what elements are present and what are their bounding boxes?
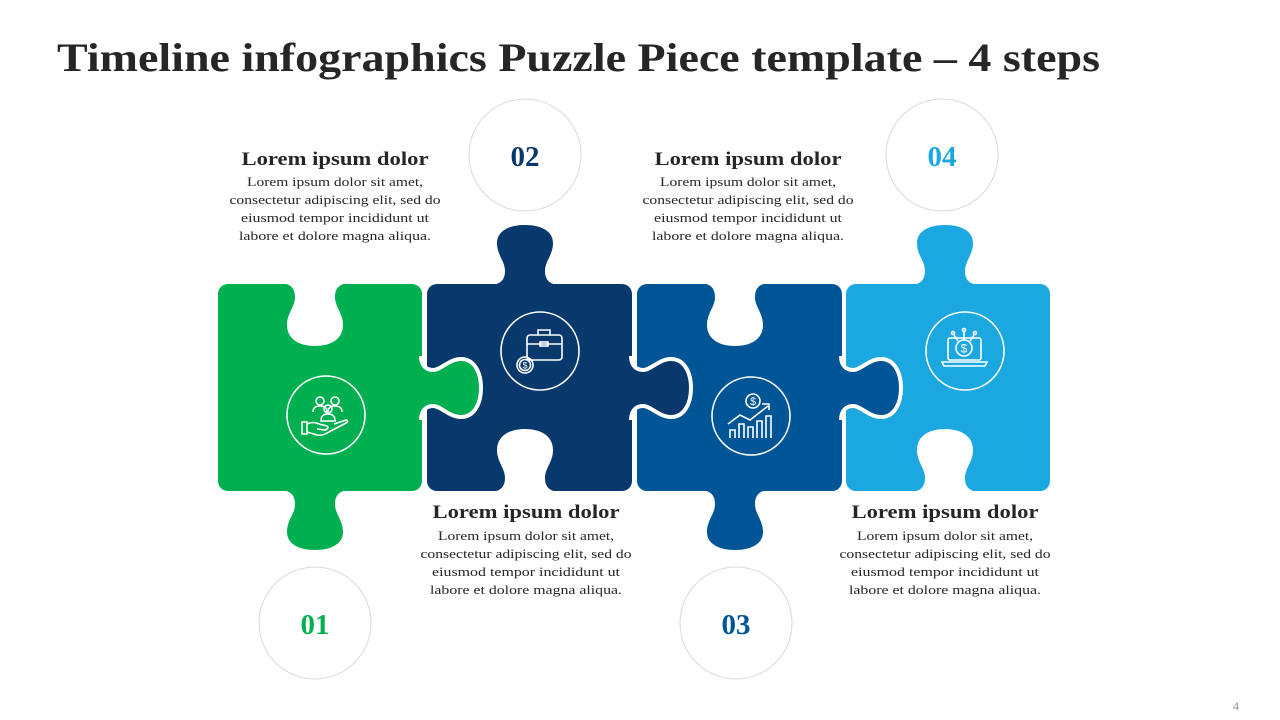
number circle 02: 02 — [510, 141, 540, 173]
icon: hand with people — [287, 376, 365, 454]
text block: step 3: Lorem ipsum dolor — [654, 149, 842, 170]
puzzle side tabs — [421, 356, 901, 420]
text block: step 1: eiusmod tempor incididunt ut — [241, 210, 429, 225]
icon: laptop with dollar: $ — [961, 342, 968, 356]
text block: step 1: Lorem ipsum dolor sit amet, — [247, 174, 423, 189]
icon: growth chart — [712, 377, 790, 455]
text block: step 3: Lorem ipsum dolor sit amet, — [660, 174, 836, 189]
text block: step 1 — [230, 149, 440, 243]
number circle 01: 01 — [300, 609, 330, 641]
text block: step 4 — [840, 502, 1050, 597]
text block: step 2: eiusmod tempor incididunt ut — [432, 564, 620, 579]
text block: step 1: Lorem ipsum dolor — [242, 149, 429, 170]
number circle 03 — [680, 567, 792, 679]
text block: step 4: Lorem ipsum dolor sit amet, — [857, 528, 1033, 543]
text block: step 4: Lorem ipsum dolor — [852, 502, 1039, 523]
text block: step 2: labore et dolore magna aliqua. — [430, 582, 622, 597]
text block: step 2 — [420, 502, 632, 597]
text block: step 4: consectetur adipiscing elit, sed do — [840, 546, 1050, 561]
text block: step 3: eiusmod tempor incididunt ut — [654, 210, 842, 225]
text block: step 2: Lorem ipsum dolor — [432, 502, 620, 523]
icon: growth chart: $ — [750, 396, 756, 408]
text block: step 1: consectetur adipiscing elit, sed do — [230, 192, 440, 207]
number circle 04: 04 — [928, 141, 956, 173]
text block: step 3: labore et dolore magna aliqua. — [652, 228, 844, 243]
number circle 04 — [886, 99, 998, 211]
puzzle holes — [279, 283, 981, 492]
puzzle: step 2 navy — [427, 225, 632, 491]
puzzle: step 4 light blue — [846, 225, 1050, 491]
title: Timeline infographics Puzzle Piece template – 4 steps — [57, 35, 1100, 80]
number circle 02 — [469, 99, 581, 211]
text block: step 4: eiusmod tempor incididunt ut — [851, 564, 1039, 579]
page number: 4 — [1233, 699, 1239, 713]
text block: step 1: labore et dolore magna aliqua. — [239, 228, 431, 243]
text block: step 3 — [642, 149, 854, 243]
number circle 01 — [259, 567, 371, 679]
puzzle: step 3 blue — [637, 284, 842, 550]
text block: step 2: Lorem ipsum dolor sit amet, — [438, 528, 614, 543]
text block: step 2: consectetur adipiscing elit, sed do — [420, 546, 632, 561]
puzzle: step 1 green — [218, 284, 422, 550]
number circle 03: 03 — [722, 609, 750, 641]
text block: step 3: consectetur adipiscing elit, sed do — [642, 192, 854, 207]
icon: laptop with dollar — [926, 312, 1004, 390]
text block: step 4: labore et dolore magna aliqua. — [849, 582, 1041, 597]
icon: briefcase with coin — [501, 312, 579, 390]
icon: briefcase with coin: $ — [522, 360, 528, 370]
